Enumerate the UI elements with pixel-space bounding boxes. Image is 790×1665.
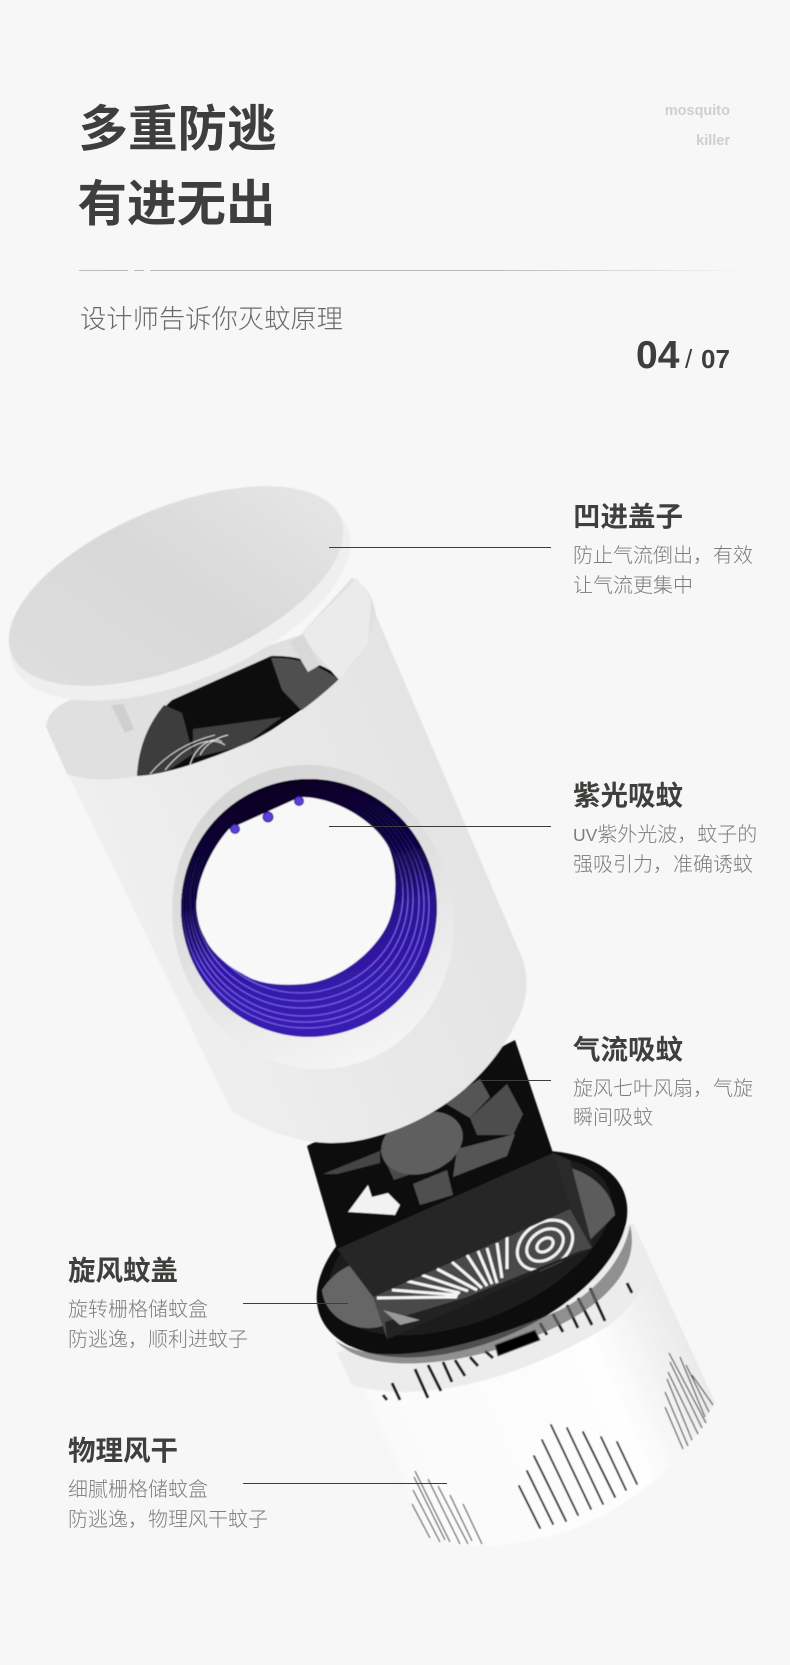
subtitle: 设计师告诉你灭蚊原理 (80, 304, 343, 334)
callout: 紫光吸蚊 (573, 780, 757, 876)
circular recess (138, 733, 488, 1101)
fan band (337, 1153, 570, 1297)
callout leader lines (243, 548, 551, 1484)
callout: 旋风蚊盖: 旋风蚊盖 (68, 1255, 178, 1286)
page number: 07 (701, 344, 730, 374)
callout: 物理风干 (68, 1435, 268, 1531)
callout: 凹进盖子: 防止气流倒出，有效 (573, 544, 753, 567)
page number: / (685, 344, 693, 374)
fan housing (307, 1040, 593, 1297)
fan blades (323, 1079, 523, 1205)
page number (636, 334, 730, 377)
english tag: mosquito killer: mosquito (665, 103, 730, 119)
callout: 气流吸蚊: 旋风七叶风扇，气旋 (573, 1077, 753, 1100)
english tag: mosquito killer (665, 103, 730, 149)
english tag: mosquito killer: killer (696, 133, 730, 149)
central opening (196, 797, 395, 985)
black bucket ring (286, 1109, 658, 1399)
callout: 物理风干: 细腻栅格储蚊盒 (68, 1478, 208, 1501)
LED beads (230, 796, 304, 834)
callout: 旋风蚊盖: 防逃逸，顺利进蚊子 (68, 1328, 248, 1351)
spiral grille (373, 1209, 592, 1340)
fan hub (372, 1100, 472, 1186)
UV light ring (181, 779, 437, 1037)
callout: 凹进盖子: 凹进盖子 (573, 501, 683, 532)
callout: 气流吸蚊 (573, 1034, 753, 1129)
product illustration: exploded mosquito killer (0, 445, 715, 1546)
title: 多重防逃 (78, 102, 276, 157)
callout: 紫光吸蚊: 强吸引力，准确诱蚊 (573, 853, 753, 876)
title: 有进无出 (78, 177, 276, 232)
callout: 凹进盖子 (573, 501, 753, 597)
callout: 气流吸蚊: 气流吸蚊 (573, 1034, 683, 1065)
page number: 04 (636, 334, 680, 377)
title (78, 102, 276, 232)
callout: 气流吸蚊: 瞬间吸蚊 (573, 1106, 653, 1129)
callout: 紫光吸蚊: 紫光吸蚊 (573, 780, 683, 811)
bucket vent stripes (519, 1425, 637, 1528)
callout: 物理风干: 物理风干 (68, 1435, 178, 1466)
fan opening (348, 1185, 400, 1215)
callout: 旋风蚊盖: 旋转栅格储蚊盒 (68, 1298, 208, 1321)
lower bucket (337, 1223, 715, 1546)
callout: 凹进盖子: 让气流更集中 (573, 574, 693, 597)
interior dark chamber (111, 578, 371, 778)
lid (0, 445, 380, 744)
callout: 旋风蚊盖 (68, 1255, 248, 1351)
upper body back wall (46, 578, 376, 790)
upper body shell (68, 615, 526, 1143)
callout: 物理风干: 防逃逸，物理风干蚊子 (68, 1508, 268, 1531)
callout: 紫光吸蚊: UV紫外光波，蚊子的 (573, 823, 757, 846)
